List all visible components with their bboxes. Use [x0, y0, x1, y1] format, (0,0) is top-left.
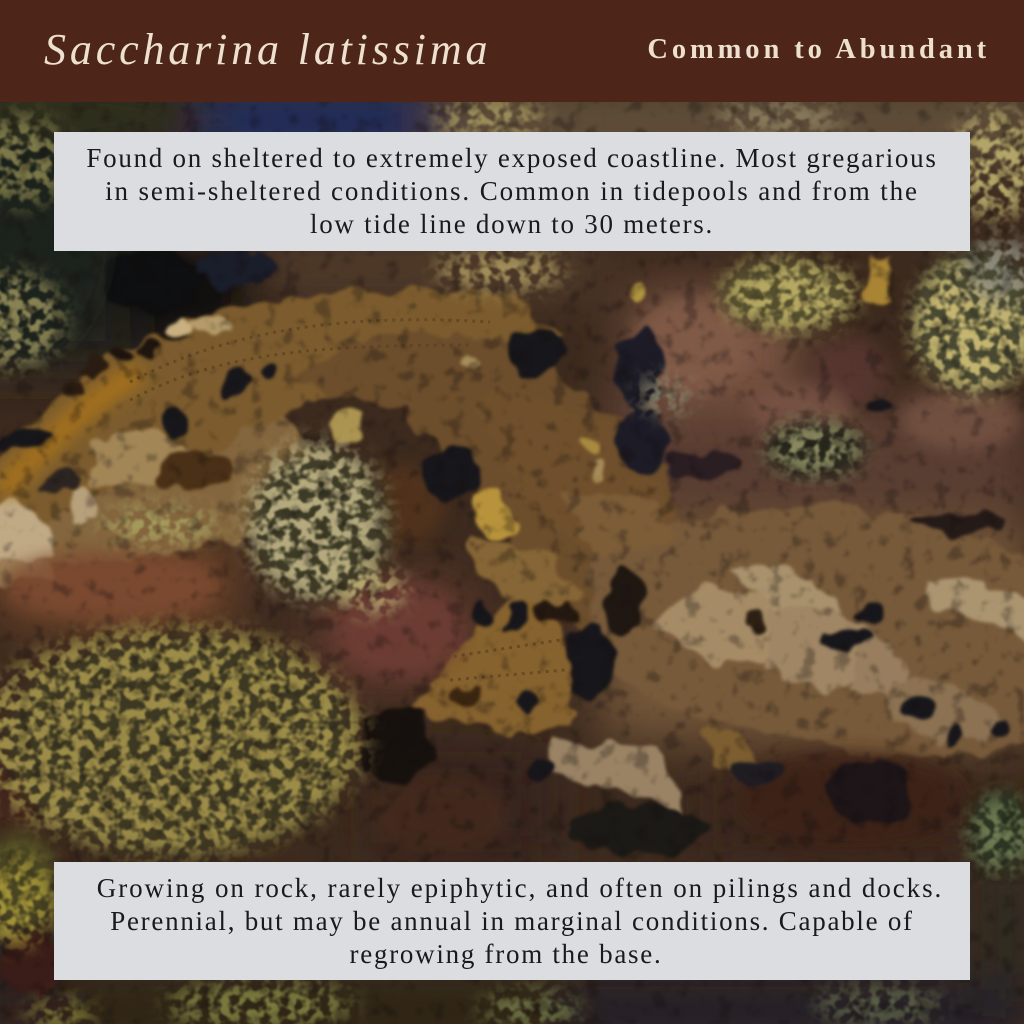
second frond — [290, 332, 690, 650]
text panel: growth — [54, 862, 970, 980]
yellow curls of kelp — [166, 255, 890, 541]
dark gaps between fronds — [0, 248, 1010, 995]
title: species name: Saccharina latissima — [44, 25, 491, 74]
pale curled ruffles at the left — [0, 502, 55, 560]
pale lobes — [650, 588, 775, 665]
text panel: habitat: low tide line down to 30 meters. — [310, 209, 714, 239]
lower skirt of the long frond — [0, 400, 330, 570]
upper long frond — [0, 290, 565, 540]
text panel: habitat — [54, 132, 970, 251]
header band — [0, 0, 1024, 102]
text panel: growth: Perennial, but may be annual in marginal conditions. Capable of — [110, 906, 914, 936]
abundance label: Common to Abundant — [647, 34, 990, 65]
pink-mauve clouds — [0, 297, 1020, 855]
text panel: growth: Growing on rock, rarely epiphytic, and often on pilings and docks. — [97, 873, 943, 903]
right kelp mass — [590, 506, 1024, 755]
middle lobes right of the second frond — [470, 394, 680, 560]
text panel: growth: regrowing from the base. — [350, 939, 662, 969]
gold midrib of the frond — [0, 372, 140, 492]
kelp fronds with ruffled edges — [0, 290, 1024, 815]
lower kelp blade — [405, 595, 574, 735]
text panel: habitat: Found on sheltered to extremely exposed coastline. Most gregarious — [86, 143, 938, 173]
dotted ridges along the frond — [130, 320, 565, 680]
text panel: habitat: in semi-sheltered conditions. Common in tidepools and from the — [105, 176, 919, 206]
